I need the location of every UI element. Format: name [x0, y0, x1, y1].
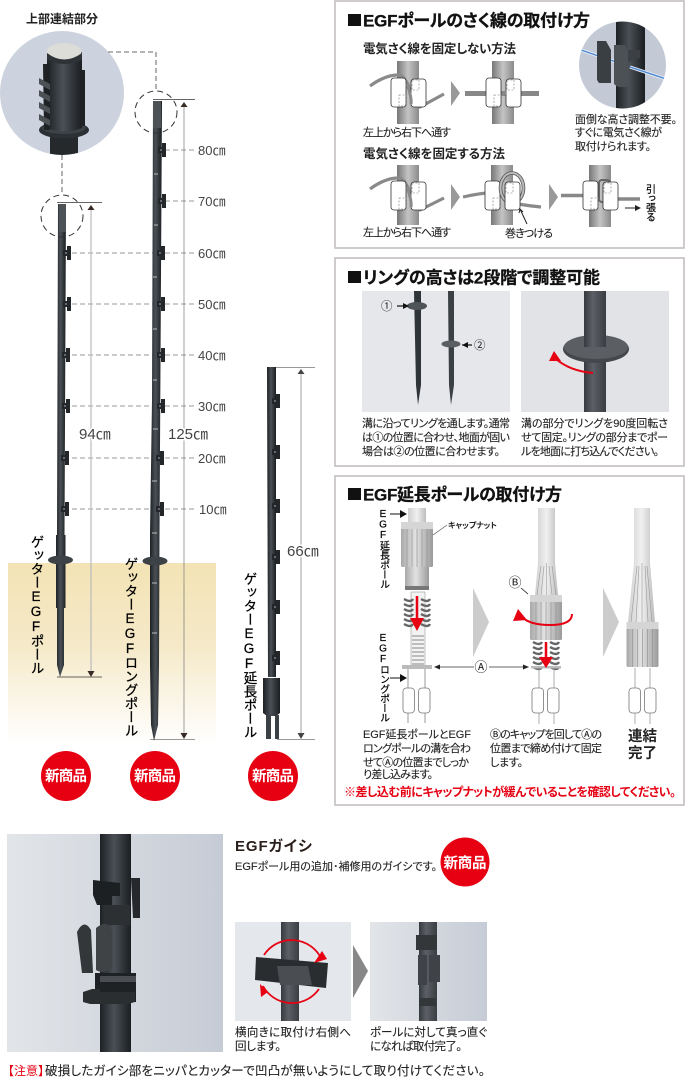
dimension: 125cm [150, 100, 208, 740]
pole: getter EGF extension pole [263, 367, 280, 739]
label: pull: 引っ張る [644, 184, 656, 222]
diagram: complete [626, 508, 658, 724]
arrow head: pull [635, 205, 641, 211]
note: no height adjustment: 面倒な高さ調整不要。 [575, 112, 677, 126]
vertical label: long pole: EGFロングポール [378, 633, 390, 722]
height tick guides [72, 150, 194, 509]
tick labels: 20㎝ [198, 451, 225, 466]
photo: ring positions [362, 291, 510, 412]
tick labels: 60㎝ [198, 246, 225, 261]
panel: wire attachment [335, 1, 684, 248]
note: no height adjustment: 取付けられます。 [575, 140, 651, 153]
diagram: not fixed step 1 [370, 61, 444, 124]
badge: new product 2: 新商品 [134, 768, 176, 785]
label: top connection part: 上部連結部分 [26, 11, 98, 26]
diagram: insert step [401, 508, 433, 723]
caption: step 1: せてⒶの位置までしっか [363, 756, 469, 769]
tick labels: 70㎝ [198, 194, 225, 209]
caption: threading 2: 左上から右下へ通す [363, 225, 451, 239]
tick labels [198, 143, 226, 517]
arrow: pull [625, 207, 638, 209]
caption: sideways: 回します。 [235, 1040, 281, 1053]
dimension: 66cm [267, 368, 319, 740]
dimension: 125cm: 125㎝ [168, 426, 208, 443]
caption: aligned: になれば取付完了。 [370, 1040, 462, 1053]
arrow: next [353, 945, 368, 998]
caption: complete: 連結 [628, 727, 657, 745]
distance A: Ⓐ [474, 660, 488, 674]
caption: sideways [235, 1025, 351, 1053]
photo: insulator close-up [579, 20, 666, 110]
photo: aligned mounting [370, 922, 487, 1021]
arrow: step [451, 184, 460, 210]
arrow: step [549, 184, 558, 210]
caption: step 1: り差し込みます。 [363, 768, 433, 781]
tick labels: 10㎝ [199, 502, 226, 517]
panel: ring height [335, 258, 684, 466]
badge: new product 1: 新商品 [45, 768, 87, 785]
arrow: long pole pointer [390, 674, 407, 682]
badge: new product 3: 新商品 [252, 768, 294, 785]
photo: ring positions: ② [474, 339, 486, 352]
caption: ring right [520, 416, 668, 458]
warning note: ※差し込む前にキャップナットが緩んでいることを確認してください。 [344, 784, 676, 799]
caption: sideways: 横向きに取付け右側へ [235, 1025, 351, 1039]
badge: new product 1 [41, 751, 91, 801]
vertical label: extension pole: EGF延長ポール [378, 509, 390, 589]
panel: extension pole [335, 476, 684, 805]
photo: ring positions: ① [381, 300, 393, 313]
badge: new product 4: 新商品 [444, 855, 486, 872]
distance A [434, 660, 529, 674]
caption: ring right: 溝の部分でリングを90度回転さ [521, 416, 668, 430]
vertical name: EGF pole: ゲッターEGFポール [28, 535, 44, 674]
caption: complete [628, 727, 657, 762]
dimension: 94cm [57, 202, 111, 677]
tick labels: 30㎝ [198, 399, 225, 414]
caption: ring left [362, 416, 510, 458]
description: EGFポール用の追加･補修用のガイシです。 [235, 859, 437, 873]
photo: top connection close-up [0, 31, 124, 156]
heading: extension pole: EGF延長ポールの取付け方 [363, 484, 562, 504]
caption: step 2: Ⓑのキャップを回してⒶの [490, 728, 602, 741]
arrow: extension pole pointer [390, 510, 407, 518]
dashed highlight circles [41, 91, 177, 237]
vertical name: EGF extension pole: ゲッターEGF延長ポール [242, 572, 257, 738]
step arrow 1 [473, 588, 489, 657]
badge: new product 2 [130, 751, 180, 801]
pole: getter EGF long pole [142, 101, 168, 741]
caption: aligned: ポールに対して真っ直ぐ [370, 1025, 487, 1039]
caption: wrap: 巻きつける [505, 227, 553, 240]
step arrow 2 [603, 588, 619, 657]
tick labels: 80㎝ [198, 143, 225, 158]
caption: ring left: 溝に沿ってリングを通します。通常 [362, 416, 510, 430]
caption: step 2: 位置まで締め付けて固定 [490, 741, 602, 755]
cap nut label [433, 521, 497, 535]
diagram: not fixed step 2 [465, 61, 539, 124]
arrow: step [451, 81, 460, 106]
caption: complete: 完了 [628, 744, 657, 762]
caption: aligned [370, 1025, 487, 1053]
heading: ring height: リングの高さは2段階で調整可能 [363, 268, 600, 288]
connector dashes to pole tops [62, 52, 156, 195]
caption: threading 1: 左上から右下へ通す [363, 125, 451, 139]
heading: wire attachment: EGFポールのさく線の取付け方 [363, 10, 590, 30]
caption: step 1: ロングポールの溝を合わ [363, 741, 471, 755]
note: no height adjustment: すぐに電気さく線が [575, 125, 662, 139]
photo: EGF insulator large [7, 834, 223, 1052]
caption: step 1: EGF延長ポールとEGF [363, 728, 471, 741]
tick labels: 40㎝ [198, 348, 225, 363]
diagram: fixed step 3 [561, 165, 640, 227]
caption: ring right: せて固定。リングの部分までポー [521, 430, 668, 444]
dimension: 66cm: 66㎝ [287, 543, 319, 560]
badge: new product 4 [440, 838, 490, 886]
note: no height adjustment [575, 112, 677, 153]
vertical name: EGF long pole: ゲッターEGFロングポール [122, 557, 138, 737]
caption: step 2: します。 [490, 756, 523, 769]
cap nut label: キャップナット [448, 521, 497, 530]
caption: ring left: は①の位置に合わせ、地面が固い [362, 430, 510, 444]
diagram: tighten step: Ⓑ [508, 575, 522, 590]
subheading: fixed: 電気さく線を固定する方法 [363, 146, 505, 161]
pole: getter EGF pole [48, 204, 73, 677]
caption: step 2 [490, 728, 602, 769]
diagram: tighten step [508, 508, 572, 724]
subheading: not fixed: 電気さく線を固定しない方法 [363, 41, 516, 56]
diagram: fixed step 1 [370, 165, 444, 225]
tick labels: 50㎝ [198, 297, 225, 312]
ground cross-section [8, 563, 216, 745]
badge: new product 3 [248, 751, 298, 801]
caption: step 1 [363, 728, 471, 781]
dimension: 94cm: 94㎝ [79, 426, 111, 443]
caption: ring right: ルを地面に打ち込んでください。 [520, 444, 659, 458]
pointer: wrap [519, 209, 527, 224]
caption: ring left: 場合は②の位置に合わせます。 [362, 445, 500, 458]
photo: sideways mounting [235, 922, 351, 1021]
diagram: fixed step 2 [463, 165, 541, 225]
photo: ring rotation [521, 291, 669, 412]
heading: EGF insulator: EGFガイシ [235, 838, 312, 855]
